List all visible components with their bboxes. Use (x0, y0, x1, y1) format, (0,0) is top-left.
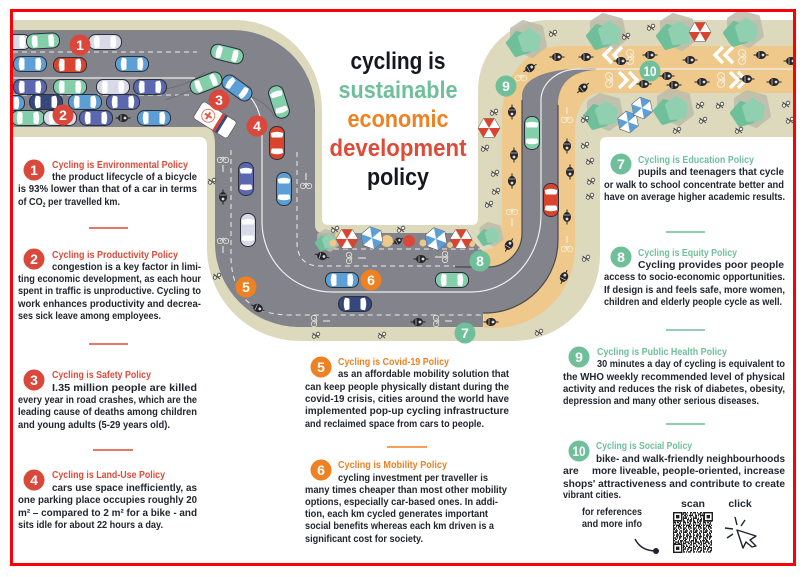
text block 1: environmental: the product lifecycle of a bicycle (52, 171, 197, 183)
scan label and QR code (673, 498, 713, 553)
title: cycling is (350, 48, 446, 75)
map number badges: 9 (502, 78, 510, 94)
map number badges: 6 (367, 272, 375, 288)
text block 6: mobility: options, especially car-based ones. In addi- (305, 496, 498, 508)
text block 10: social: 10 (572, 443, 586, 459)
text block 6: mobility: significant cost for society. (305, 533, 423, 545)
text block 5: covid-19: covid-19 crisis, cities around the world have (305, 393, 509, 405)
scan label and QR code: scan (681, 498, 705, 510)
map number badges (52, 34, 660, 344)
text block 2: productivity: ses sick leave among employees. (18, 310, 161, 322)
text block 5: covid-19: as an affordable mobility solution that (338, 368, 509, 380)
text block 9: public health (563, 346, 785, 407)
text block 8: equity: Cycling is Equity Policy (638, 247, 737, 259)
text block 9: public health: Cycling is Public Health Policy (597, 346, 727, 358)
text block 2: productivity (17, 248, 201, 322)
text block 2: productivity: ting economic development, as each hour (18, 273, 201, 285)
text block 3: safety: and young adults (5-29 years old). (18, 419, 170, 431)
text block 7: education: or walk to school concentrate better and (604, 179, 784, 191)
chevrons on cycle path (604, 47, 746, 88)
text block 2: productivity: work enhances productivity and decrea- (17, 298, 201, 310)
text block 8: equity: 8 (617, 249, 625, 265)
click label and cursor icon: click (728, 498, 752, 510)
references note with pointer: and more info (582, 518, 642, 530)
title: development (330, 135, 467, 162)
text block 1: environmental: 2 (43, 203, 46, 209)
text block 5: covid-19: and reclaimed space from cars to people. (305, 418, 484, 430)
pedestrians on verge (208, 24, 794, 338)
text block 5: covid-19: Cycling is Covid-19 Policy (338, 356, 449, 368)
text block 6: mobility: tion, each km cycled generates important (305, 508, 488, 520)
grey carriageway (13, 30, 596, 327)
text block 7: education: 7 (617, 156, 625, 172)
text block 6: mobility (305, 459, 507, 545)
title: economic (348, 106, 448, 133)
text block 8: equity: Cycling provides poor people (638, 259, 784, 271)
text block 5: covid-19: 5 (317, 359, 325, 375)
text block 1: environmental: 1 (30, 162, 38, 178)
text block 4: land-use: one parking place occupies roughly 20 (18, 494, 197, 506)
text block 7: education: Cycling is Education Policy (638, 154, 754, 166)
text block 5: covid-19 (305, 356, 509, 430)
text block 2: productivity: spent in traffic is unproductive. Cycling to (18, 285, 201, 297)
text block 9: public health: the WHO weekly recommended level of physical (563, 371, 785, 383)
map number badges: 5 (242, 279, 250, 295)
text block 7: education (604, 154, 785, 203)
text block 6: mobility: cycling investment per traveller is (338, 472, 488, 484)
text block 9: public health: depression and many other serious diseases. (563, 395, 759, 407)
parklet with parasols and trees (316, 223, 502, 252)
text block 4: land-use: 4 (30, 472, 38, 488)
text block 10: social: Cycling is Social Policy (596, 440, 692, 452)
text block 3: safety: 3 (30, 372, 38, 388)
text block 4: land-use: cars use space inefficiently, as (52, 482, 197, 494)
text block 1: environmental: of CO (18, 196, 47, 208)
text block 7: education: have on average higher academic results. (604, 191, 785, 203)
text block 10: social (563, 440, 785, 501)
map number badges: 4 (253, 118, 261, 134)
text block 8: equity: children and elderly people cycle as well. (604, 296, 782, 308)
text block 3: safety: Cycling is Safety Policy (52, 369, 151, 381)
text block 2: productivity: congestion is a key factor in limi- (52, 261, 201, 273)
cyclists (116, 51, 798, 326)
text block 9: public health: activity and reduces the risk of diabetes, obesity, (563, 383, 785, 395)
lane lines (13, 69, 793, 292)
text block 1: environmental: is 93% lower than that of a car in terms (18, 183, 197, 195)
title: policy (367, 164, 430, 191)
text block 9: public health: 30 minutes a day of cycling is equivalent to (597, 358, 785, 370)
text block 4: land-use: sits idle for about 22 hours a day. (18, 519, 163, 531)
map number badges: 8 (476, 253, 484, 269)
map number badges: 2 (59, 107, 67, 123)
text block 10: social: vibrant cities. (563, 489, 621, 501)
map number badges: 1 (76, 37, 84, 53)
text block 2: productivity: 2 (30, 251, 38, 267)
references note with pointer: for references (582, 506, 642, 518)
map number badges: 3 (215, 92, 223, 108)
text block 6: mobility: social benefits whereas each km driven is a (305, 520, 494, 532)
text block 10: social: shops' attractiveness and contribute to create (563, 478, 785, 490)
trees and parasols, top right (478, 12, 769, 138)
text block 3: safety (18, 369, 197, 431)
ambulance (193, 101, 237, 139)
text block 1: environmental: Cycling is Environmental Policy (52, 159, 188, 171)
text block 4: land-use: m² – compared to 2 m² for a bike - and (18, 507, 197, 519)
road network background (13, 20, 793, 341)
text block 10: social: more liveable, people-oriented, increase (592, 465, 785, 477)
title: sustainable (338, 77, 458, 104)
map number badges: 10 (644, 63, 657, 79)
references note with pointer (582, 506, 659, 554)
text block 10: social: bike- and walk-friendly neighbourhoods (596, 453, 785, 465)
orange cycle path (484, 46, 793, 328)
text block 3: safety: every year in road crashes, which are the (18, 394, 197, 406)
text block 4: land-use: Cycling is Land-Use Policy (52, 469, 165, 481)
beige verge (13, 20, 793, 341)
dividers (89, 228, 705, 450)
text block 5: covid-19: can keep people physically distant during the (305, 381, 509, 393)
text block 6: mobility: many times cheaper than most other mobility (305, 484, 507, 496)
click label and cursor icon (725, 498, 756, 548)
text block 10: social: are (563, 465, 579, 477)
text block 1: environmental (18, 159, 197, 209)
text block 4: land-use (18, 469, 197, 531)
text block 1: environmental: per travelled km. (46, 196, 120, 208)
title (330, 48, 467, 191)
text block 6: mobility: 6 (317, 462, 325, 478)
text block 8: equity (604, 246, 785, 308)
text block 2: productivity: Cycling is Productivity Policy (52, 249, 178, 261)
text block 7: education: pupils and teenagers that cycle (638, 166, 784, 178)
text block 5: covid-19: implemented pop-up cycling infrastructure (305, 405, 509, 417)
map number badges: 7 (461, 325, 469, 341)
text block 3: safety: I.35 million people are killed (52, 382, 197, 394)
cars (0, 33, 558, 312)
text block 8: equity: If design is and feels safe, more women, (604, 284, 785, 296)
text block 9: public health: 9 (575, 349, 583, 365)
bike lane markers (217, 50, 746, 327)
text block 8: equity: access to socio-economic opportunities. (604, 271, 785, 283)
text block 3: safety: leading cause of deaths among children (18, 406, 197, 418)
text block 6: mobility: Cycling is Mobility Policy (338, 459, 447, 471)
